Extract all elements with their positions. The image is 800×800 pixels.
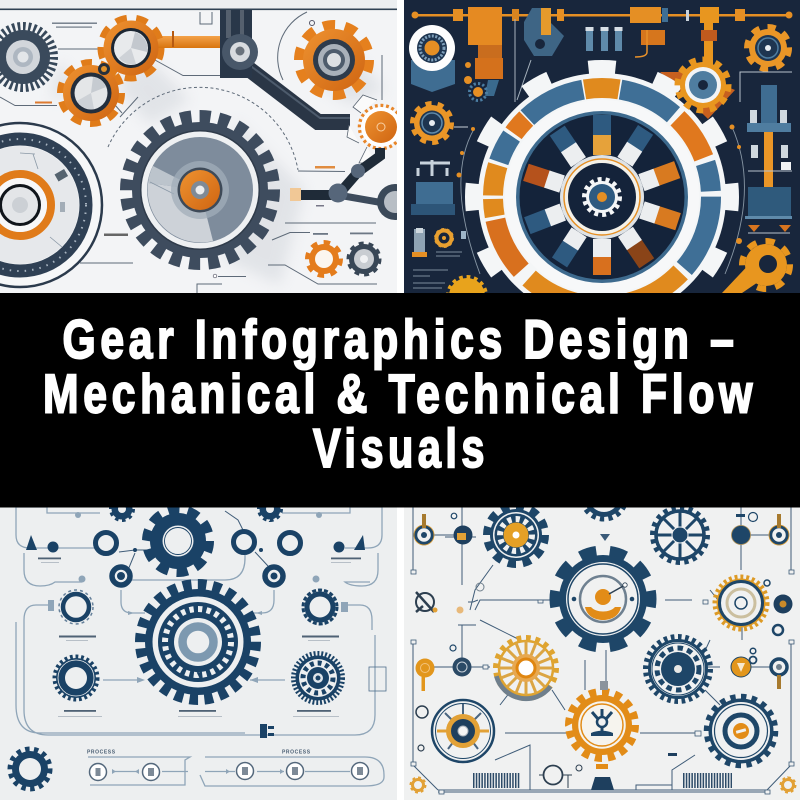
icon: orange gear upper [101,18,161,78]
labels: PROCESS [87,750,311,756]
icon: bottom orange gear [448,277,486,315]
icon: orange pipe [156,31,222,48]
process step icons [90,762,368,780]
spokes [593,115,611,155]
icon: orange gear left [412,104,452,142]
icon: orange wrench [722,241,790,293]
icon: orange gear top right [747,27,789,69]
icon: side gears [59,590,337,624]
icon: lower left gear [54,656,98,700]
icon: bottom gear [11,750,49,788]
icon: bearing block [409,25,455,92]
centre hub [560,155,644,239]
panel: navy process flow gears [0,508,397,800]
title: Visuals [313,417,489,479]
title [43,308,757,479]
panel: orange and slate mechanical gears [0,0,397,293]
main gear wheel [448,43,756,351]
icon: top centre gear clipped [582,475,626,519]
icon: right orange sprocket [347,95,402,163]
icon: amber and grey wheel [496,638,556,698]
icon: small orange gear [308,242,340,276]
ring segments [448,43,756,351]
icon: orange gear with dial [678,60,728,110]
title band [0,293,800,508]
captions [38,558,361,717]
captions [35,22,373,236]
icon: left machinery [411,160,462,288]
icon: large slate gear [127,117,273,263]
icon: orange press block [464,7,503,100]
icon: orange gear lower [61,63,121,123]
frame and connector lines [413,507,791,792]
icon: blue clamp [524,8,564,56]
labels: PROCESS: PROCESS [282,750,311,756]
icon: spoked wheel [652,508,708,562]
icon: small ring joint [98,63,110,75]
icon: main centre gear [555,551,651,647]
icon: orange mount behind main gear [660,23,735,119]
connector lines [0,12,382,293]
icon: amber fine gear [715,577,767,629]
icon: amber main gear [569,692,635,758]
icon: orange valve [635,30,665,57]
icon: dark wheel right [646,637,710,701]
connector nodes [411,570,794,794]
icon: small nodes [414,512,792,751]
icon: small dark gear [348,244,380,274]
icon: top small gears [75,498,322,520]
icon: right column machine [740,72,792,233]
icon: lower right gear [706,696,776,766]
labels: PROCESS: PROCESS [87,750,116,756]
icon: left dial [0,123,102,287]
icon: top centre gear [148,511,208,571]
panel: navy technical gear wheel [404,0,800,293]
icon: central process gear [141,585,255,699]
icon: sunburst gear [0,26,54,88]
icon: ring nodes [26,532,365,612]
icon: lower right gear [294,654,342,702]
connector block [260,724,274,738]
icon: lower left wheel [432,700,494,762]
icon: base machinery [473,753,732,790]
icon: slate linkage and pipe [290,148,413,220]
icon: small amber corner gears [410,778,796,792]
icon: top left wheel [488,506,544,564]
icon: dark bracket and arm [220,10,350,122]
panel: navy and amber gear network [404,508,800,800]
icon: orange gear right [299,25,369,95]
connector arcs [454,19,744,274]
arrows [112,611,284,774]
connector lines [16,507,386,786]
icon: capsules [586,27,622,51]
top orange rail [412,7,792,23]
